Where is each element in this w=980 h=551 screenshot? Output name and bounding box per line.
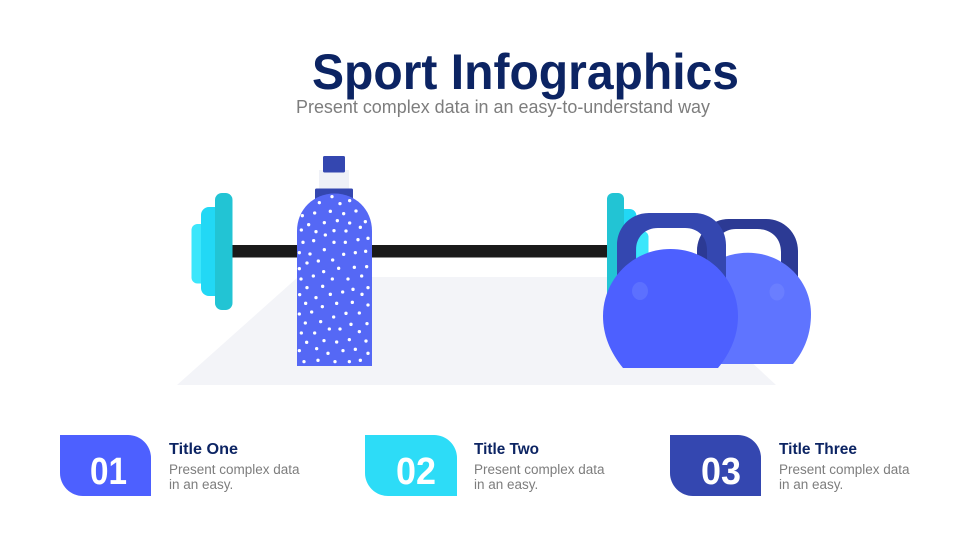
bottle body — [297, 194, 372, 366]
number badge 03: 03 — [701, 451, 741, 493]
number badge 03 — [670, 435, 761, 496]
number badge 01 — [60, 435, 151, 496]
front kettlebell — [603, 213, 738, 368]
front kettlebell body — [603, 249, 738, 368]
description one: in an easy. — [169, 477, 233, 492]
item one — [60, 435, 300, 496]
front kettlebell handle — [617, 213, 726, 320]
number badge 02 — [365, 435, 457, 496]
subtitle: Present complex data in an easy-to-understand way — [296, 96, 711, 117]
heading: title three: Title Three — [779, 441, 857, 458]
bar — [230, 245, 610, 258]
description three: in an easy. — [779, 477, 843, 492]
back kettlebell handle — [697, 219, 798, 320]
water bottle — [297, 156, 372, 366]
back kettlebell body — [685, 253, 811, 364]
item three — [670, 435, 910, 496]
bottle neck — [319, 170, 349, 192]
number badge 02: 02 — [396, 451, 436, 493]
heading: title one: Title One — [169, 441, 238, 458]
description two: Present complex data — [474, 462, 605, 477]
left weight plates — [192, 193, 232, 310]
bottle collar — [315, 188, 353, 202]
title: Sport Infographics — [312, 44, 739, 100]
bottle dots — [299, 197, 368, 362]
number badge 01: 01 — [90, 451, 127, 493]
back kettlebell highlight — [770, 284, 784, 300]
back kettlebell — [685, 219, 811, 364]
right weight plates — [607, 193, 648, 318]
barbell — [192, 193, 648, 318]
floor shape — [177, 277, 776, 385]
description two: in an easy. — [474, 477, 538, 492]
front kettlebell highlight — [632, 282, 648, 300]
bottle cap — [323, 156, 345, 172]
description three: Present complex data — [779, 462, 910, 477]
heading: title two: Title Two — [474, 441, 539, 458]
item two — [365, 435, 605, 496]
description one: Present complex data — [169, 462, 300, 477]
